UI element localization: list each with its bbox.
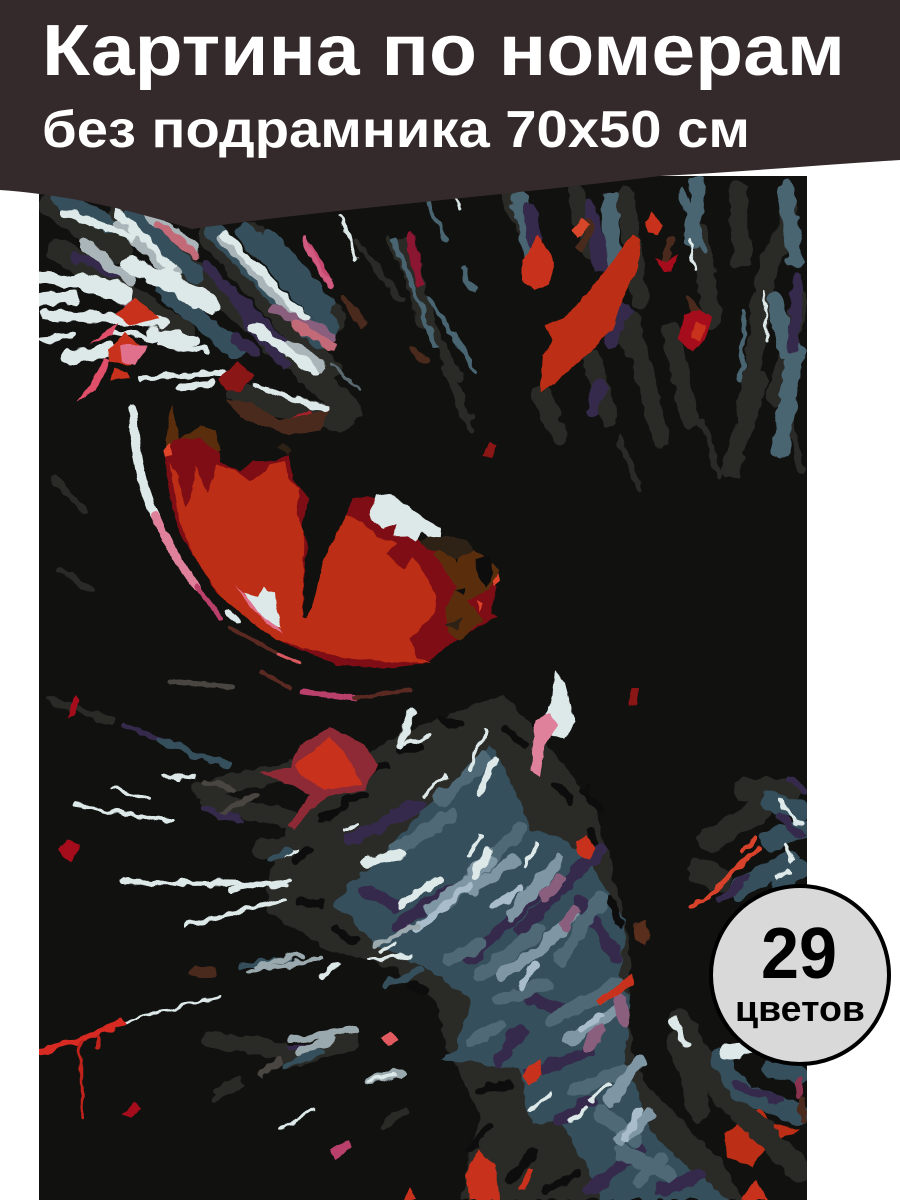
top streaks <box>305 180 800 490</box>
fur mass black speckles <box>295 720 620 1190</box>
lower fur strokes <box>285 710 700 1190</box>
right side fur <box>672 780 805 1170</box>
eye: brown upper corner <box>166 404 221 452</box>
title: Картина по номерам <box>42 11 845 91</box>
cat eye <box>163 405 500 668</box>
header banner <box>0 0 900 229</box>
eye: white glint <box>370 493 442 542</box>
badge label: цветов <box>735 988 865 1029</box>
white and pink nose highlight <box>531 670 575 776</box>
lower fur mass <box>267 695 745 1200</box>
eye: dark red iris base <box>165 438 497 668</box>
eye: brown right corner <box>433 537 500 640</box>
painting: cat eye artwork <box>39 176 807 1200</box>
subtitle: без подрамника 70х50 см <box>42 101 750 159</box>
eye: lower white reflection <box>244 587 282 628</box>
top-right red blobs <box>483 212 712 706</box>
eye: orange iris <box>170 462 437 663</box>
mid red blob and small red accents <box>58 695 800 1200</box>
badge number: 29 <box>761 914 837 994</box>
badge: 29 colours <box>711 886 889 1064</box>
upper cheek wisps <box>39 480 645 1128</box>
eye: dark spots <box>453 553 493 595</box>
top-left fur tuft <box>39 200 358 420</box>
eye lid arc <box>133 410 410 698</box>
eye: pink reflection <box>235 585 283 633</box>
top-left red accents <box>76 240 335 435</box>
